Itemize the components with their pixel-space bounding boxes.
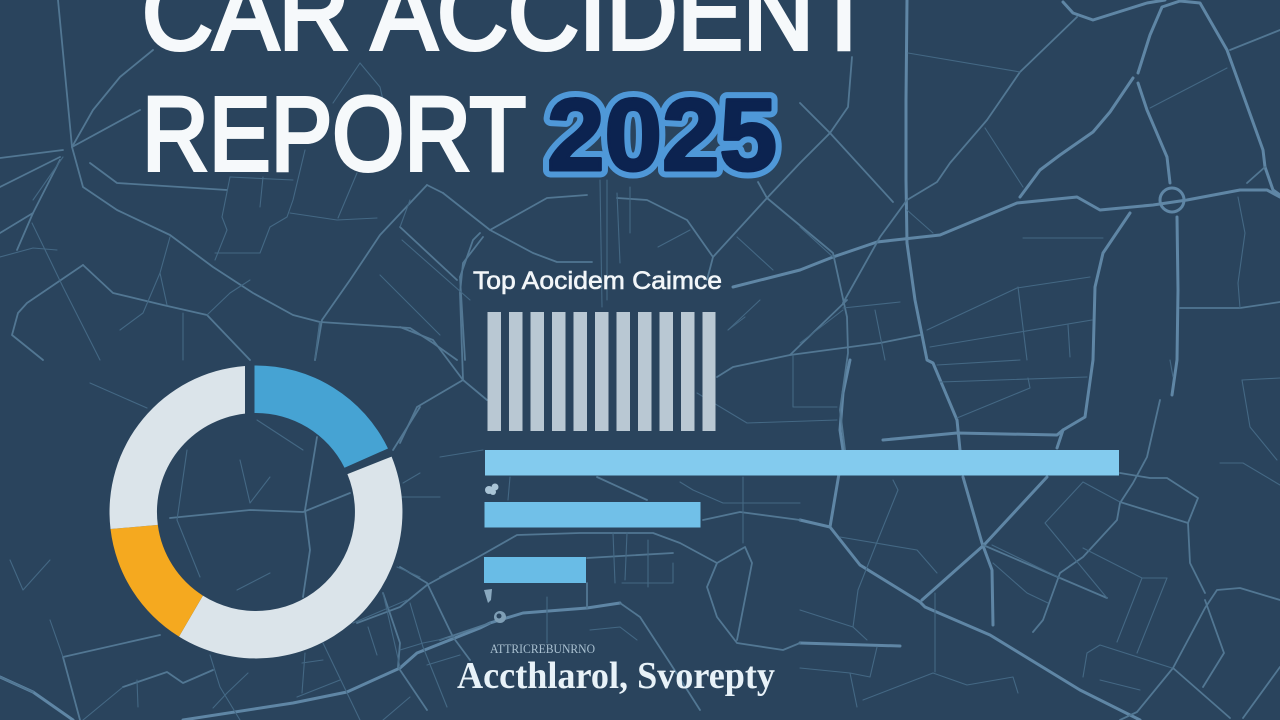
title xyxy=(142,0,874,193)
horizontal bar chart xyxy=(484,450,1119,583)
striped bar chart xyxy=(488,312,716,431)
donut segment: large white xyxy=(179,457,402,658)
bar: second cause xyxy=(484,502,700,528)
icon: third bar marker xyxy=(494,611,506,623)
bar: third cause xyxy=(484,557,586,583)
icon: first bar marker xyxy=(485,484,498,495)
donut segment: left white xyxy=(110,366,245,529)
donut chart: accident severity xyxy=(110,365,402,658)
donut segment: blue xyxy=(254,365,388,468)
heading: top accident causes: Top Aocidem Caimce xyxy=(473,267,722,295)
heading: accident severity: Accthlarol, Svorepty xyxy=(457,655,775,697)
title year badge: 2025 xyxy=(547,78,777,192)
small label: ATTRICREBUNRNO xyxy=(490,641,595,656)
roundabout xyxy=(1160,188,1184,212)
title year badge: 2025 xyxy=(547,78,777,192)
icon: second bar marker xyxy=(484,589,492,603)
title line: report: REPORT xyxy=(142,76,526,193)
donut segment: orange xyxy=(110,525,203,637)
bar: first cause xyxy=(485,450,1119,476)
